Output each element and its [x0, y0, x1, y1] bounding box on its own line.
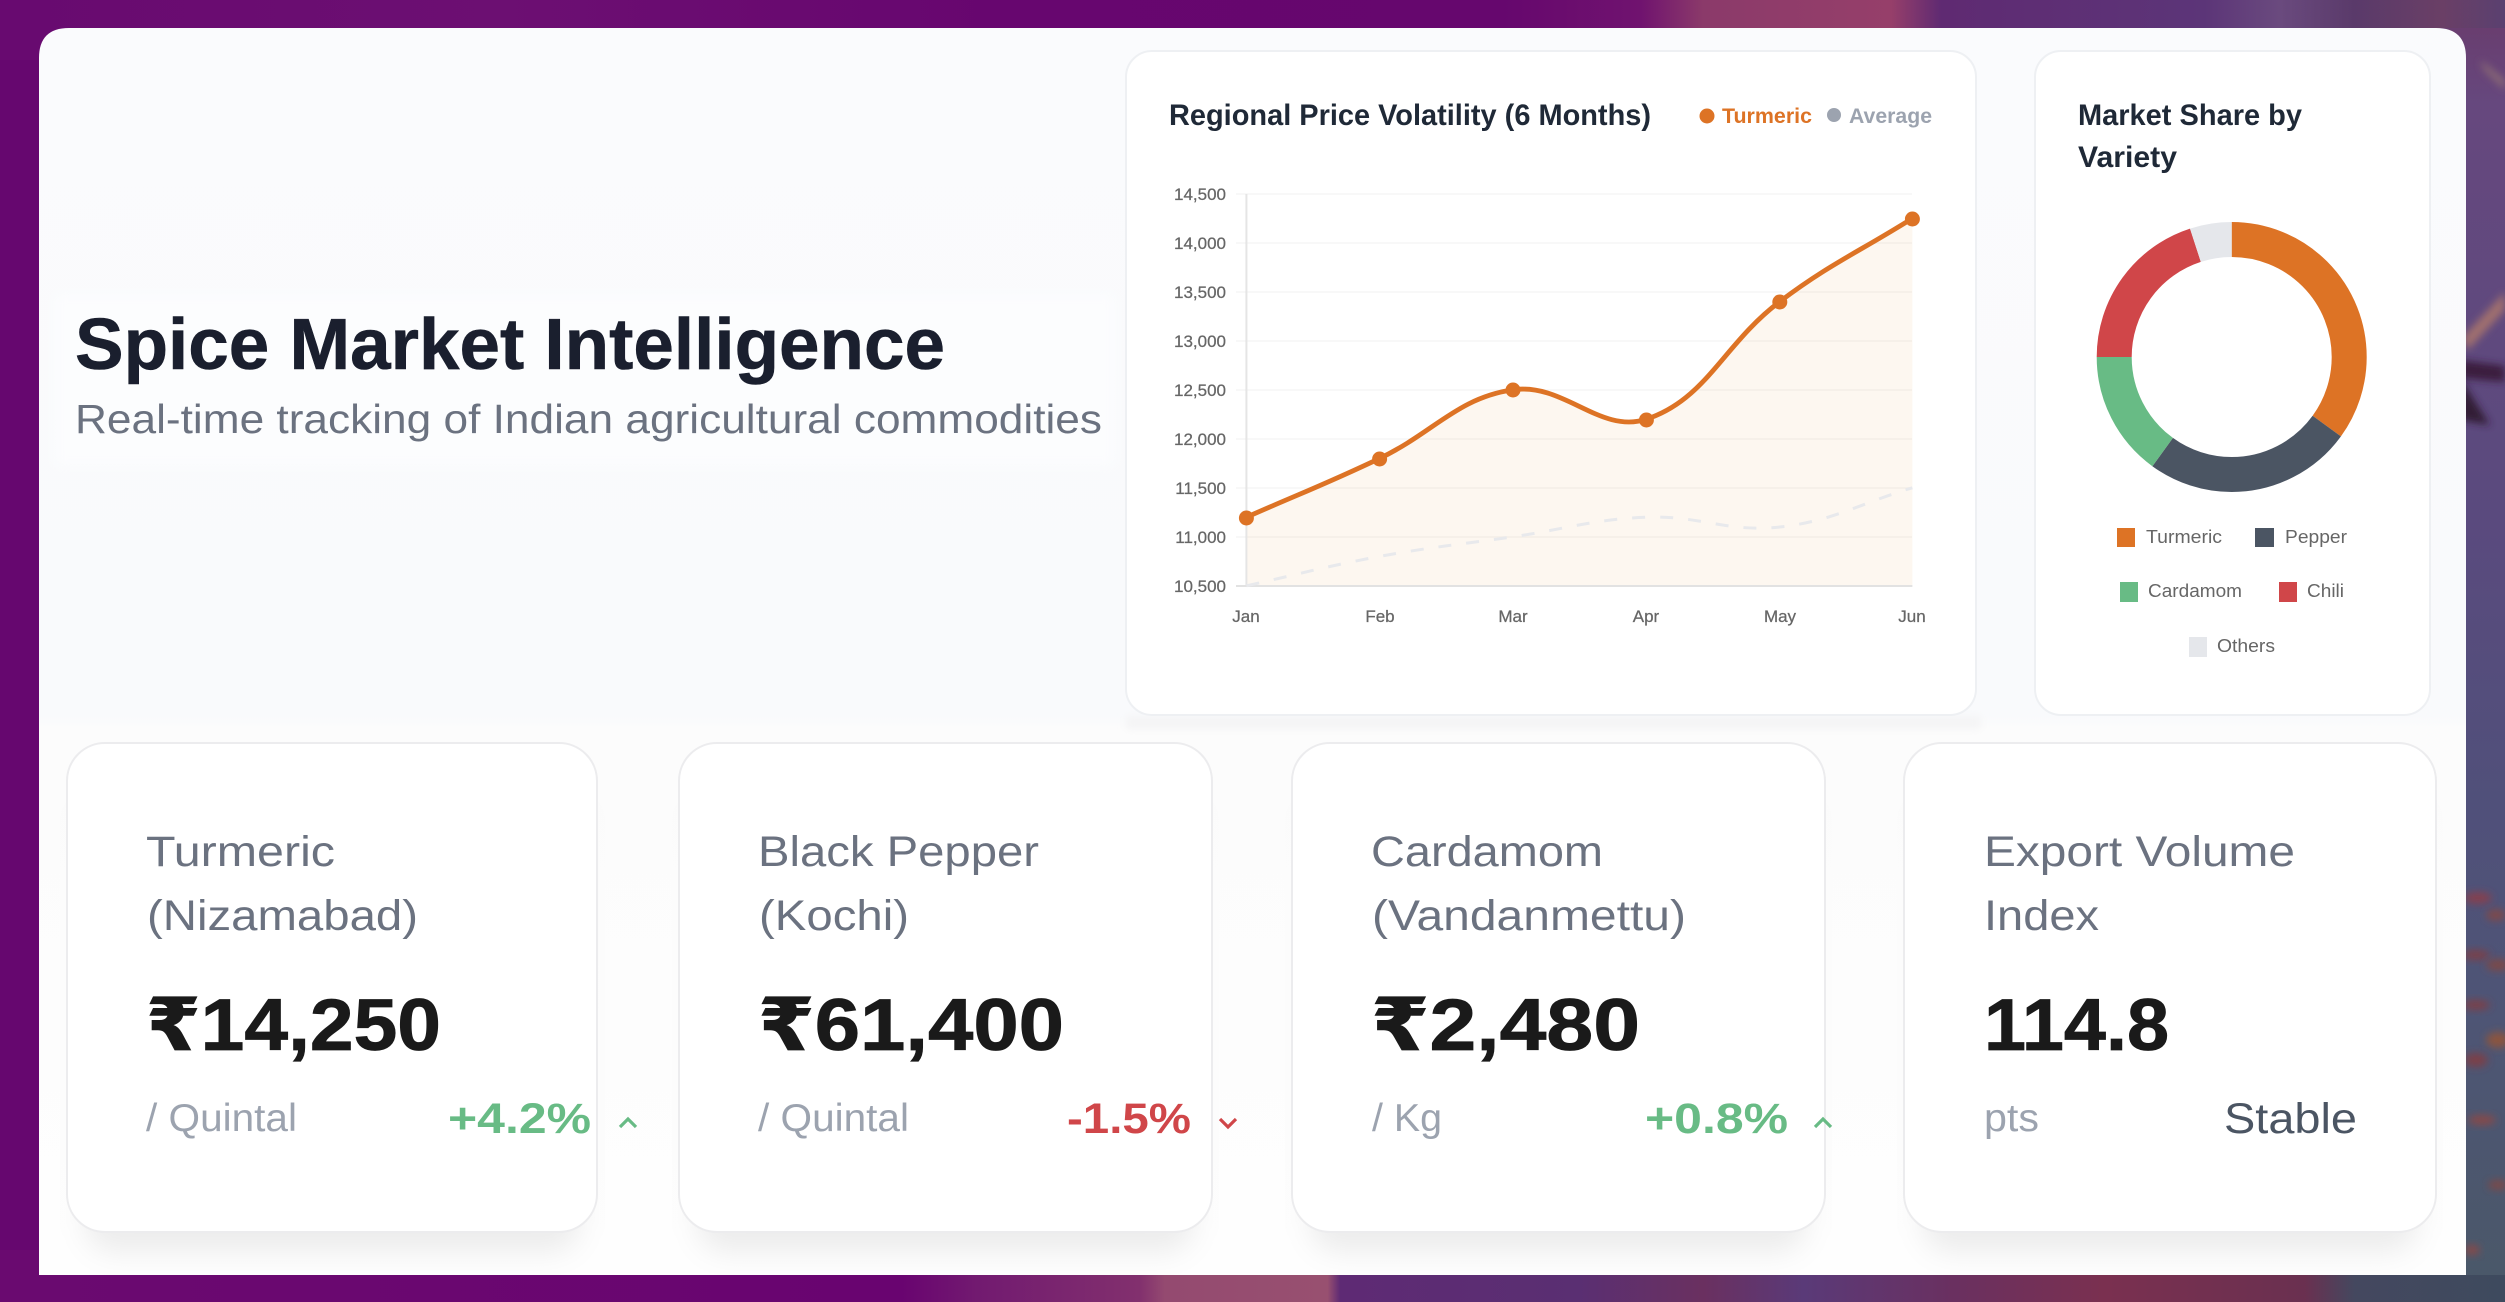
unit: / Quintal	[146, 1097, 297, 1140]
x axis labels: Feb	[1365, 607, 1395, 626]
value: ₹61,400	[758, 985, 1064, 1066]
icon: down chevron	[1220, 1119, 1236, 1127]
y axis labels: 13,000	[1174, 332, 1226, 351]
donut legend: Pepper	[2285, 527, 2347, 547]
chart legend	[1700, 105, 1932, 128]
icon: up chevron	[620, 1119, 636, 1127]
donut title	[2078, 99, 2302, 174]
x axis labels: Jan	[1232, 607, 1260, 626]
y axis labels: 14,000	[1174, 234, 1226, 253]
y axis labels	[1174, 185, 1226, 596]
donut legend: Chili	[2307, 581, 2344, 601]
label	[758, 828, 1039, 940]
change: +0.8%	[1645, 1095, 1788, 1143]
y axis labels: 12,000	[1174, 430, 1226, 449]
chart legend: Turmeric	[1722, 105, 1812, 128]
panel: regional price volatility line chart	[1126, 51, 1981, 729]
chart title: Regional Price Volatility (6 Months)	[1169, 99, 1651, 132]
header block	[75, 305, 1102, 442]
label: Black Pepper	[758, 828, 1039, 876]
change: +4.2%	[448, 1095, 591, 1143]
metric card: black pepper	[679, 743, 1236, 1252]
change: -1.5%	[1067, 1095, 1191, 1143]
donut title: Market Share by	[2078, 99, 2302, 132]
y axis labels: 10,500	[1174, 577, 1226, 596]
label: Index	[1984, 892, 2100, 940]
label: (Nizamabad)	[147, 892, 418, 940]
donut legend: Cardamom	[2148, 581, 2242, 601]
x axis labels: Apr	[1633, 607, 1660, 626]
metric card: turmeric	[67, 743, 636, 1252]
label: (Kochi)	[759, 892, 909, 940]
donut title: Variety	[2078, 141, 2177, 174]
x axis labels: Mar	[1498, 607, 1528, 626]
label	[1371, 828, 1686, 940]
chart legend: Average	[1849, 105, 1932, 128]
turmeric area fill	[1246, 218, 1912, 586]
x axis labels: Jun	[1898, 607, 1926, 626]
label: Turmeric	[146, 828, 335, 876]
panel: market share donut chart	[2035, 51, 2430, 715]
metric card: cardamom	[1292, 743, 1831, 1252]
label: (Vandanmettu)	[1372, 892, 1686, 940]
metric card: export volume index	[1904, 743, 2436, 1252]
axis lines	[1236, 194, 1912, 586]
icon: up chevron	[1815, 1119, 1831, 1127]
value: 114.8	[1984, 985, 2169, 1066]
donut legend: Others	[2217, 636, 2275, 656]
x axis labels: May	[1764, 607, 1797, 626]
donut legend	[2117, 527, 2347, 657]
label	[146, 828, 418, 940]
status: Stable	[2224, 1095, 2357, 1143]
donut chart	[2114, 240, 2349, 474]
value: ₹2,480	[1371, 985, 1640, 1066]
y axis labels: 13,500	[1174, 283, 1226, 302]
label: Export Volume	[1984, 828, 2295, 876]
average dashed line	[1246, 488, 1912, 586]
subtitle: Real-time tracking of Indian agricultural commodities	[75, 396, 1102, 442]
turmeric data points	[1239, 212, 1920, 526]
turmeric line	[1246, 218, 1912, 517]
y axis labels: 12,500	[1174, 381, 1226, 400]
y axis labels: 14,500	[1174, 185, 1226, 204]
unit: / Kg	[1372, 1097, 1442, 1140]
y axis labels: 11,500	[1175, 479, 1226, 498]
y axis labels: 11,000	[1175, 528, 1226, 547]
value: ₹14,250	[146, 985, 441, 1066]
x axis labels	[1232, 607, 1926, 626]
label	[1984, 828, 2295, 940]
unit: / Quintal	[758, 1097, 909, 1140]
unit: pts	[1984, 1097, 2039, 1140]
title: Spice Market Intelligence	[75, 305, 945, 385]
label: Cardamom	[1371, 828, 1603, 876]
donut legend: Turmeric	[2146, 527, 2222, 547]
